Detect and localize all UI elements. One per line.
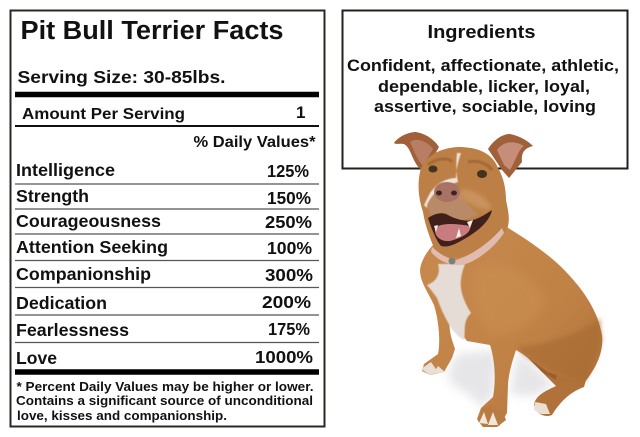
ingredients heading: Ingredients [428, 21, 536, 42]
tongue [435, 224, 470, 241]
ingredients list: dependable, licker, loyal, [378, 77, 590, 96]
ingredients list: Confident, affectionate, athletic, [347, 56, 619, 75]
brow shading [428, 159, 492, 170]
row: attention seeking [16, 237, 312, 258]
belly shadow [518, 350, 560, 380]
row: love: Love [16, 348, 57, 368]
floor shadow [449, 350, 555, 408]
row: companionship [16, 264, 313, 285]
row: intelligence [16, 160, 309, 181]
amount per serving: 1 [296, 103, 305, 122]
row: intelligence: Intelligence [16, 160, 115, 180]
muzzle [427, 186, 478, 222]
teeth [434, 220, 473, 238]
left paw toes [421, 362, 445, 375]
footnote: love, kisses and companionship. [17, 408, 227, 423]
footnote: Contains a significant source of unconditional [16, 393, 313, 408]
daily values heading: % Daily Values* [194, 134, 316, 151]
footnote [16, 379, 314, 423]
row: courageousness: 250% [265, 212, 312, 232]
right ear [488, 134, 533, 178]
head blaze [424, 153, 461, 208]
collar [431, 228, 504, 265]
footnote: * Percent Daily Values may be higher or lower. [16, 379, 314, 394]
icon: sitting dog photo-style illustration [394, 132, 602, 427]
haunch shading [518, 318, 602, 382]
row: fearlessness [16, 319, 310, 340]
amount per serving: Amount Per Serving [22, 106, 185, 123]
ingredients list [347, 56, 619, 116]
rear leg and foot [534, 370, 586, 416]
front paw toes [478, 405, 506, 427]
row: courageousness [16, 211, 312, 232]
amount per serving [22, 103, 305, 123]
row: strength: 150% [267, 188, 311, 208]
cheek [460, 190, 492, 209]
row: dedication: 200% [262, 292, 311, 312]
nose [434, 182, 460, 202]
row: strength [16, 186, 311, 208]
ingredients list: assertive, sociable, loving [374, 97, 596, 116]
shoulder highlight [473, 264, 545, 335]
eyes [428, 166, 438, 172]
title: Pit Bull Terrier Facts [20, 17, 284, 45]
row: strength: Strength [16, 186, 89, 206]
row: love: 1000% [255, 347, 313, 367]
row: intelligence: 125% [267, 161, 309, 181]
row: fearlessness: Fearlessness [16, 320, 129, 340]
serving size: Serving Size: 30-85lbs. [18, 67, 226, 87]
open mouth [428, 210, 492, 247]
left ear [394, 132, 439, 172]
panel: pit bull terrier facts label [10, 10, 324, 426]
dog head and neck [419, 147, 509, 258]
row: companionship: 300% [265, 265, 313, 285]
row: fearlessness: 175% [268, 319, 310, 339]
row: attention seeking: Attention Seeking [16, 237, 168, 257]
row: courageousness: Courageousness [16, 211, 161, 231]
row: dedication: Dedication [16, 293, 107, 313]
row: love [16, 347, 313, 368]
row: dedication [16, 292, 311, 313]
front legs and body [420, 226, 602, 427]
white chest patch [427, 264, 471, 340]
panel: ingredients [342, 10, 628, 168]
row: companionship: Companionship [16, 264, 151, 284]
row: attention seeking: 100% [267, 238, 312, 258]
